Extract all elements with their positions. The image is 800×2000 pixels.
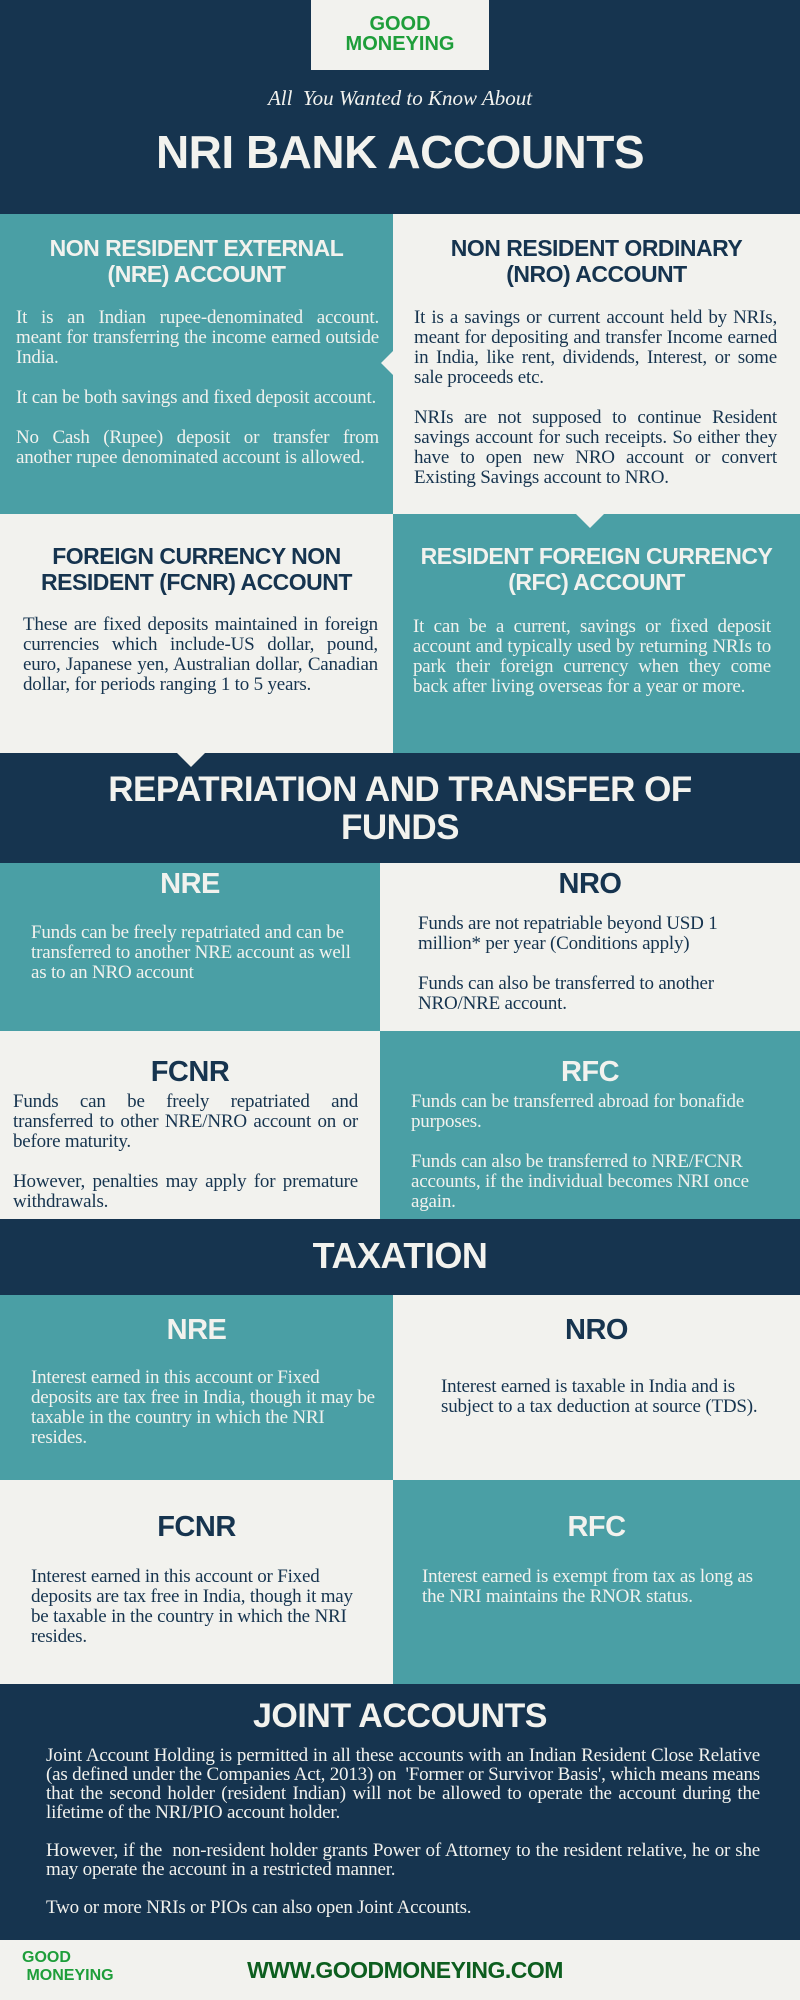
panel: NRE tax: NRE [167, 1314, 226, 1346]
panel: FCNR repatriation: However, penalties may apply for premature withdrawals. [13, 1171, 358, 1212]
panel: NRE tax: Interest earned in this account or Fixed deposits are tax free in India, though it may be taxable in the country in which the NRI resides. [31, 1367, 375, 1448]
panel: NRE tax [0, 1295, 393, 1480]
panel: NRE account [0, 214, 393, 514]
panel: RFC tax: RFC [567, 1511, 626, 1543]
footer logo [22, 1949, 114, 1984]
logo [311, 0, 489, 70]
arrow [381, 351, 393, 375]
panel: RFC repatriation: RFC [561, 1056, 619, 1088]
heading [421, 543, 772, 595]
heading: RESIDENT (FCNR) ACCOUNT [41, 569, 352, 595]
footer [0, 1940, 800, 2000]
panel: FCNR account [0, 514, 393, 753]
text: It can be both savings and fixed deposit account. [16, 387, 376, 408]
subtitle: All You Wanted to Know About [268, 86, 532, 110]
heading: (RFC) ACCOUNT [508, 569, 685, 595]
heading [41, 543, 352, 595]
panel: NRO repatriation: NRO [559, 868, 621, 900]
panel: NRO tax: NRO [565, 1314, 628, 1346]
heading: NON RESIDENT EXTERNAL [50, 235, 343, 261]
text: It is an Indian rupee-denominated account. meant for transferring the income earned outside India. [16, 307, 379, 368]
logo: MONEYING [346, 33, 454, 55]
arrow [175, 1031, 203, 1045]
title: NRI BANK ACCOUNTS [156, 126, 644, 178]
panel: joint accounts [0, 1684, 800, 1940]
text: NRIs are not supposed to continue Resident savings account for such receipts. So either they have to open new NRO account or convert Existing Savings account to NRO. [414, 407, 777, 488]
panel: RFC repatriation [380, 1031, 800, 1219]
heading [451, 235, 742, 287]
panel: NRO repatriation [380, 863, 800, 1031]
text: These are fixed deposits maintained in foreign currencies which include-US dollar, pound, euro, Japanese yen, Australian dollar, Canadian dollar, for periods ranging 1 to 5 years. [23, 614, 378, 695]
section header: repatriation: FUNDS [341, 808, 459, 847]
arrow [177, 753, 205, 767]
panel: FCNR repatriation [0, 1031, 380, 1219]
panel: NRO tax: Interest earned is taxable in India and is subject to a tax deduction at source (TDS). [441, 1376, 757, 1417]
panel: joint accounts: Two or more NRIs or PIOs can also open Joint Accounts. [46, 1897, 471, 1918]
panel: RFC repatriation: Funds can also be transferred to NRE/FCNR accounts, if the individual becomes NRI once again. [411, 1151, 749, 1212]
panel: NRE repatriation: NRE [160, 868, 220, 900]
heading: RESIDENT FOREIGN CURRENCY [421, 543, 772, 569]
website: WWW.GOODMONEYING.COM [247, 1957, 563, 1983]
panel: FCNR tax: Interest earned in this account or Fixed deposits are tax free in India, though it may be taxable in the country in which the NRI resides. [31, 1566, 353, 1647]
panel: NRE repatriation [0, 863, 380, 1031]
text: It is a savings or current account held by NRIs, meant for depositing and transfer Income earned in India, like rent, dividends, Interest, or some sale proceeds etc. [414, 307, 777, 388]
panel: RFC tax [393, 1480, 800, 1684]
heading [50, 235, 344, 287]
section header: repatriation: REPATRIATION AND TRANSFER OF [108, 770, 692, 809]
heading: (NRO) ACCOUNT [506, 261, 687, 287]
panel: FCNR repatriation: FCNR [151, 1056, 229, 1088]
text [16, 307, 379, 468]
arrow [576, 514, 604, 528]
section header: taxation: TAXATION [313, 1235, 487, 1276]
panel: RFC repatriation: Funds can be transferred abroad for bonafide purposes. [411, 1091, 744, 1132]
arrow [175, 1480, 203, 1494]
footer logo: GOOD [22, 1949, 71, 1966]
panel: FCNR tax [0, 1480, 393, 1684]
logo: GOOD [369, 13, 431, 35]
heading: (NRE) ACCOUNT [108, 261, 285, 287]
text: No Cash (Rupee) deposit or transfer from another rupee denominated account is allowed. [16, 427, 379, 468]
panel: NRO tax [393, 1295, 800, 1480]
heading: FOREIGN CURRENCY NON [52, 543, 341, 569]
panel: FCNR tax: FCNR [157, 1511, 236, 1543]
header [0, 0, 800, 214]
section header: repatriation [0, 753, 800, 863]
section header: taxation [0, 1219, 800, 1295]
panel: NRO repatriation: Funds are not repatriable beyond USD 1 million* per year (Conditions apply) [418, 913, 718, 954]
text [414, 307, 778, 488]
footer logo: MONEYING [26, 1967, 114, 1984]
panel: joint accounts: Joint Account Holding is permitted in all these accounts with an Indian Resident Close Relative (as defined under the Companies Act, 2013) on 'Former or Survivor Basis', which means means that the second holder (resident Indian) will not be allowed to operate the account during the lifetime of the NRI/PIO account holder. [46, 1745, 760, 1823]
heading: NON RESIDENT ORDINARY [451, 235, 742, 261]
text: It can be a current, savings or fixed deposit account and typically used by returning NRIs to park their foreign currency when they come back after living overseas for a year or more. [413, 616, 771, 697]
panel: joint accounts: JOINT ACCOUNTS [253, 1697, 547, 1735]
panel: FCNR repatriation: Funds can be freely repatriated and transferred to other NRE/NRO account on or before maturity. [13, 1091, 358, 1152]
panel: joint accounts: However, if the non-resident holder grants Power of Attorney to the resident relative, he or she may operate the account in a restricted manner. [46, 1840, 760, 1880]
panel: RFC tax: Interest earned is exempt from tax as long as the NRI maintains the RNOR status. [422, 1566, 753, 1607]
panel: NRO repatriation: Funds can also be transferred to another NRO/NRE account. [418, 973, 714, 1014]
panel: RFC account [393, 514, 800, 753]
panel: NRE repatriation: Funds can be freely repatriated and can be transferred to another NRE account as well as to an NRO account [31, 922, 351, 983]
panel: NRO account [393, 214, 800, 514]
